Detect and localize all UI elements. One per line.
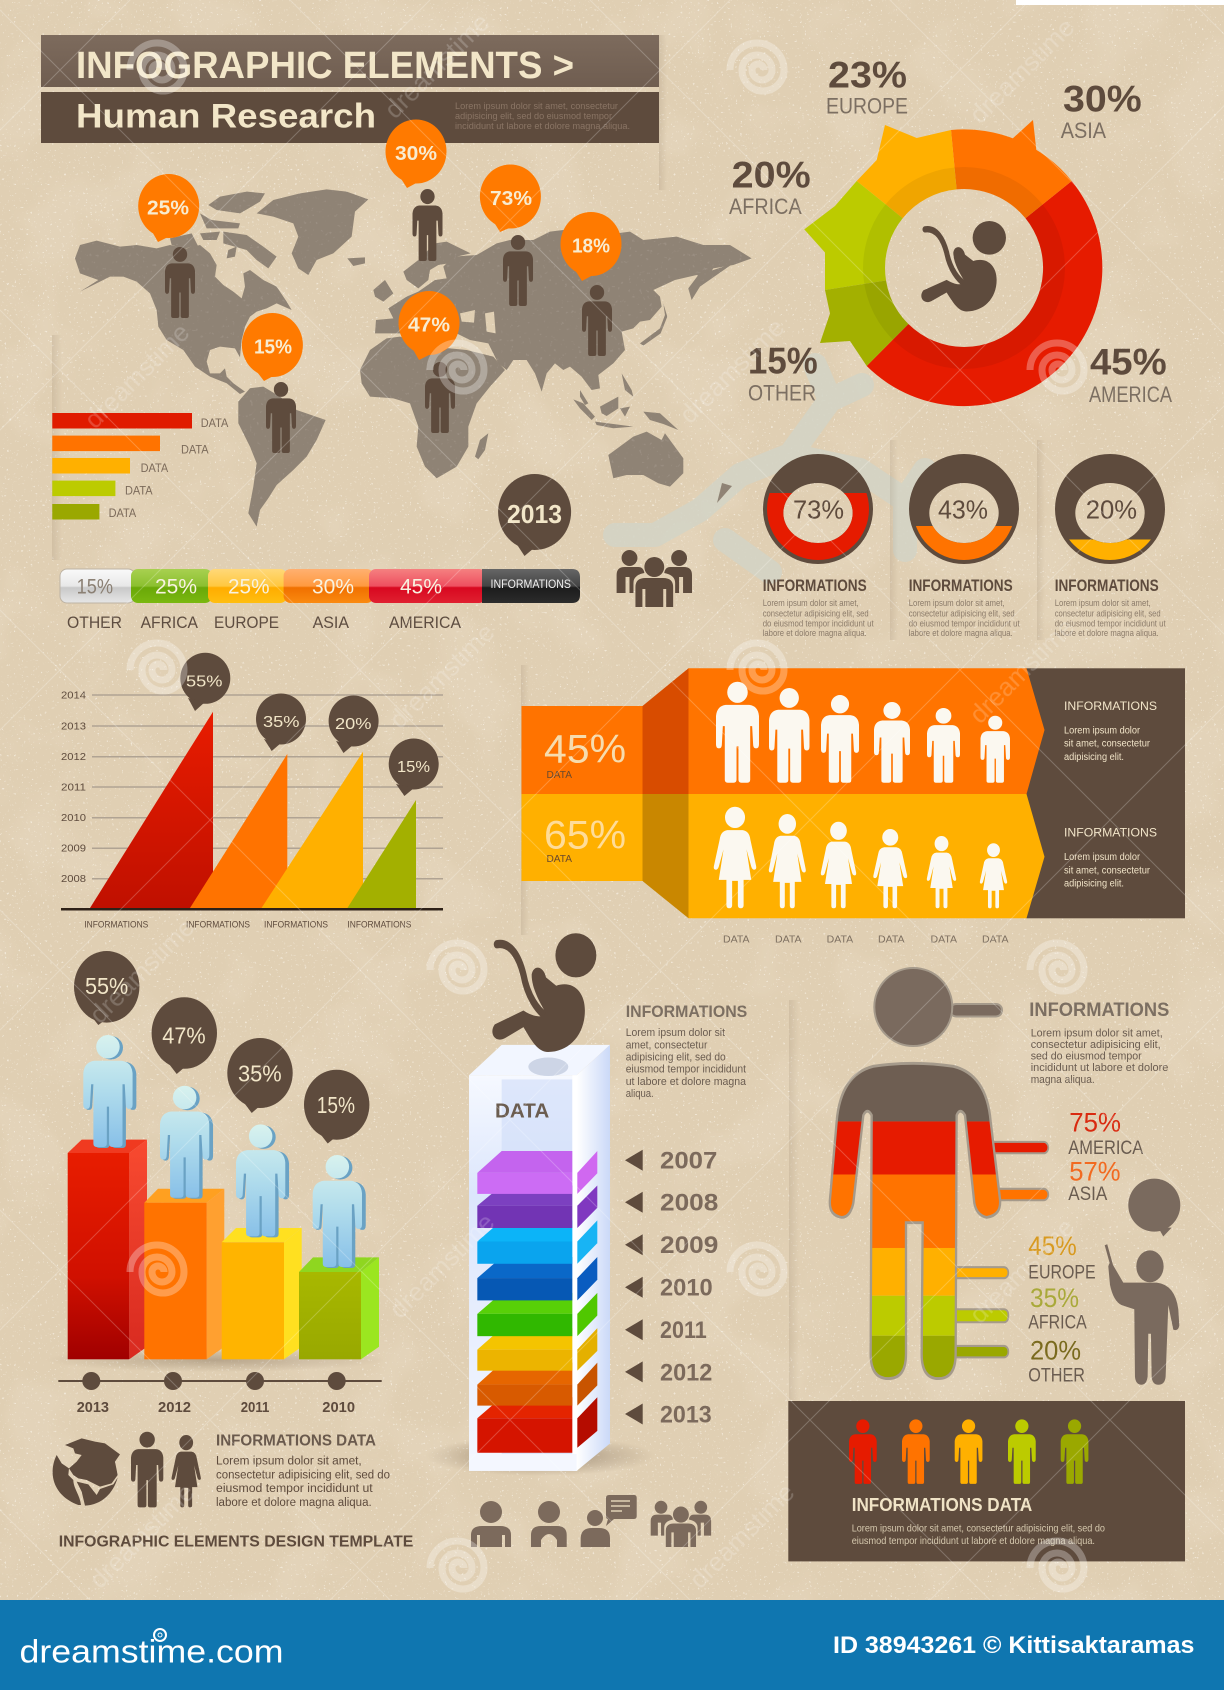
layer 2011 bbox=[477, 1328, 597, 1371]
body informations text bbox=[1029, 1000, 1169, 1086]
tower informations text bbox=[626, 1002, 747, 1100]
small donut 73%: Lorem ipsum dolor sit amet, bbox=[763, 598, 859, 609]
small donut 20%: consectetur adipisicing elit, sed bbox=[1055, 608, 1161, 620]
tower informations text: eiusmod tempor incididunt bbox=[626, 1064, 746, 1076]
bar bubble 15%: 15% bbox=[317, 1092, 355, 1118]
orange map bubbles bbox=[138, 120, 621, 381]
bar bubble 35%: 35% bbox=[238, 1060, 282, 1086]
yellow ribbon bbox=[688, 794, 1044, 918]
icon: group of people bbox=[617, 550, 692, 607]
legend panel bbox=[788, 1401, 1185, 1561]
body informations text: magna aliqua. bbox=[1031, 1074, 1095, 1086]
bar 2011 bbox=[222, 1228, 302, 1359]
bar bubble 55% bbox=[74, 951, 139, 1025]
body percentages bbox=[1028, 1108, 1121, 1365]
informations data block: labore et dolore magna aliqua. bbox=[216, 1497, 372, 1509]
layer 2013 bbox=[477, 1397, 597, 1453]
head with pointer bbox=[874, 968, 1002, 1046]
striped body bbox=[827, 1060, 1003, 1381]
bubble 15%: 15% bbox=[254, 336, 292, 358]
chart x labels bbox=[84, 919, 411, 930]
New Zealand bbox=[717, 483, 732, 503]
presenter body bbox=[1108, 1263, 1179, 1385]
small donut 20%: INFORMATIONS bbox=[1055, 577, 1159, 595]
year grid bbox=[92, 695, 443, 879]
tower informations text: aliqua. bbox=[626, 1088, 654, 1100]
bubble 25% bbox=[138, 174, 199, 242]
chart bubble 35%: 35% bbox=[263, 714, 300, 731]
2013 bubble bbox=[498, 474, 571, 556]
small donut 20%: labore et dolore magna aliqua. bbox=[1055, 628, 1159, 639]
chart bubble 15% bbox=[389, 738, 439, 796]
percentage bar labels: AMERICA bbox=[389, 613, 462, 632]
tower informations text: INFORMATIONS bbox=[626, 1002, 747, 1021]
watermark overlay: dreamstime bbox=[383, 617, 500, 734]
donut region names: AMERICA bbox=[1089, 382, 1172, 407]
glossy percentage bar bbox=[60, 569, 580, 603]
speech bubble bbox=[1128, 1179, 1180, 1237]
body diagram bbox=[827, 968, 1048, 1381]
chart bubble 20%: 20% bbox=[335, 716, 372, 733]
bar 2010 bbox=[299, 1257, 379, 1359]
2013 bubble: 2013 bbox=[507, 499, 562, 529]
glossy percentage bar: 30% bbox=[312, 575, 354, 598]
legend heading: INFORMATIONS DATA bbox=[852, 1495, 1032, 1515]
body percentages: 20% bbox=[1030, 1335, 1081, 1365]
watermark overlay: dreamstime bbox=[963, 1212, 1080, 1329]
bubble 15% bbox=[242, 313, 303, 381]
tab data labels: DATA bbox=[546, 853, 572, 865]
icon: person bust bbox=[471, 1501, 511, 1547]
orange fold bbox=[642, 668, 688, 794]
donut: Asia segment bbox=[951, 120, 1072, 218]
data labels: DATA bbox=[827, 933, 853, 945]
panel text: sit amet, consectetur bbox=[1064, 739, 1151, 750]
bubble 18% bbox=[560, 212, 622, 281]
layer 2009 bbox=[477, 1257, 597, 1300]
Africa bbox=[360, 337, 505, 478]
tab data labels: DATA bbox=[546, 769, 572, 781]
subtitle text: Human Research bbox=[76, 98, 376, 136]
blue figure 2011 bbox=[236, 1124, 289, 1237]
donut region names: AFRICA bbox=[729, 194, 802, 219]
small donut 73%: INFORMATIONS bbox=[763, 577, 867, 595]
donut: Other segment bbox=[820, 280, 908, 366]
3D bar chart bbox=[45, 951, 385, 1372]
banner lorem: incididunt ut labore et dolore magna aliqua. bbox=[455, 121, 630, 131]
watermark overlay: dreamstime bbox=[383, 1207, 500, 1324]
icon: globe bbox=[53, 1438, 120, 1506]
triangles bbox=[90, 712, 213, 908]
tower shadow bbox=[425, 1436, 655, 1476]
map people markers bbox=[165, 189, 612, 453]
percentage bar labels: AFRICA bbox=[141, 613, 199, 632]
yellow fold bbox=[642, 794, 688, 918]
bubble 73%: 73% bbox=[490, 188, 532, 210]
donut region names bbox=[729, 94, 1172, 407]
informations data block bbox=[216, 1433, 390, 1509]
year list with arrows: 2012 bbox=[660, 1359, 712, 1386]
connector bars bbox=[952, 1142, 1048, 1357]
data bars left bbox=[52, 413, 229, 520]
small donut 73% bbox=[763, 454, 874, 639]
icon: team bbox=[651, 1501, 711, 1547]
year list with arrows: 2008 bbox=[660, 1190, 718, 1217]
year axis labels: 2013 bbox=[61, 720, 86, 732]
bar bubble 47% bbox=[152, 997, 217, 1074]
presenter figure bbox=[1106, 1179, 1180, 1385]
body region names: EUROPE bbox=[1028, 1263, 1096, 1284]
glossy percentage bar: 45% bbox=[400, 575, 442, 598]
footer band bbox=[0, 1600, 1224, 1690]
bar shadow bbox=[45, 1348, 385, 1372]
watermark overlay: dreamstime bbox=[963, 612, 1080, 729]
icon: fetus bbox=[921, 221, 1006, 311]
donut: Africa segment bbox=[804, 181, 903, 290]
timeline bbox=[58, 1372, 382, 1416]
watermark overlay: dreamstime bbox=[683, 1477, 800, 1594]
panel text bbox=[1064, 699, 1157, 890]
bottom icon row bbox=[471, 1495, 711, 1547]
small donut 73%: 73% bbox=[793, 494, 844, 524]
data labels: DATA bbox=[775, 933, 802, 945]
informations data block: eiusmod tempor incididunt ut bbox=[216, 1483, 374, 1495]
donut: America segment bbox=[867, 181, 1102, 406]
tower informations text: adipisicing elit, sed do bbox=[626, 1052, 726, 1064]
percentage bar labels: OTHER bbox=[67, 613, 122, 632]
panel text: adipisicing elit. bbox=[1064, 752, 1124, 763]
percentage bar labels bbox=[67, 613, 462, 632]
body percentages: 57% bbox=[1069, 1157, 1121, 1187]
year axis labels bbox=[61, 690, 86, 885]
layer 2007 bbox=[477, 1151, 597, 1194]
year axis labels: 2011 bbox=[61, 782, 86, 794]
small donut 43%: labore et dolore magna aliqua. bbox=[909, 628, 1013, 639]
glossy percentage bar: 25% bbox=[228, 575, 270, 598]
glossy percentage bar: INFORMATIONS bbox=[490, 577, 571, 591]
bar bubble 15% bbox=[304, 1070, 369, 1144]
donut labels: 45% bbox=[1090, 342, 1167, 383]
legend figures bbox=[849, 1419, 1088, 1484]
pointer bbox=[1106, 1245, 1112, 1265]
icon: man and woman bbox=[131, 1432, 201, 1507]
brown info panel bbox=[1026, 668, 1185, 918]
chart x labels: INFORMATIONS bbox=[264, 919, 328, 930]
legend body text: Lorem ipsum dolor sit amet, consectetur adipisicing elit, sed do bbox=[852, 1523, 1105, 1535]
icon: person speaking bbox=[581, 1495, 637, 1547]
layer 2012 bbox=[477, 1363, 597, 1406]
layer 2008 bbox=[477, 1220, 597, 1264]
timeline: 2013 bbox=[77, 1399, 109, 1416]
65% label: 65% bbox=[544, 813, 626, 857]
timeline: 2012 bbox=[158, 1399, 191, 1416]
chart x labels: INFORMATIONS bbox=[186, 919, 250, 930]
chart x labels: INFORMATIONS bbox=[347, 919, 411, 930]
timeline: 2010 bbox=[322, 1399, 355, 1416]
North America bbox=[75, 241, 292, 394]
year list with arrows: 2007 bbox=[660, 1148, 717, 1175]
watermark overlay: dreamstime bbox=[78, 317, 195, 434]
informations data block: INFORMATIONS DATA bbox=[216, 1433, 376, 1450]
small donut 73%: consectetur adipisicing elit, sed bbox=[763, 608, 869, 620]
legend body text bbox=[852, 1523, 1105, 1547]
data labels: DATA bbox=[930, 933, 957, 945]
body percentages: 75% bbox=[1069, 1108, 1121, 1138]
banner lorem bbox=[455, 101, 630, 131]
body informations text: sed do eiusmod tempor bbox=[1031, 1050, 1142, 1062]
Kamchatka bbox=[688, 263, 733, 300]
data bars left: DATA bbox=[201, 418, 229, 430]
year axis labels: 2009 bbox=[61, 842, 86, 854]
year axis labels: 2010 bbox=[61, 812, 86, 824]
tower label: DATA bbox=[495, 1100, 549, 1122]
body region names bbox=[1028, 1138, 1144, 1386]
world map bbox=[75, 189, 752, 527]
data bars left: DATA bbox=[181, 445, 209, 457]
Madagascar bbox=[475, 433, 488, 459]
Scandinavia bbox=[403, 242, 471, 288]
year list with arrows: 2013 bbox=[660, 1401, 712, 1428]
presenter head bbox=[1136, 1250, 1164, 1282]
tower informations text: ut labore et dolore magna bbox=[626, 1076, 747, 1088]
year list with arrows: 2011 bbox=[660, 1317, 707, 1344]
title banner bbox=[41, 35, 659, 143]
small donut 43%: 43% bbox=[938, 494, 988, 524]
chart bubble 35% bbox=[256, 694, 306, 751]
bubble 18%: 18% bbox=[572, 236, 610, 258]
percentage bar labels: ASIA bbox=[313, 613, 350, 632]
small donut 20%: 20% bbox=[1086, 494, 1137, 524]
small donut 73%: labore et dolore magna aliqua. bbox=[763, 628, 867, 639]
watermark overlay: dreamstime bbox=[378, 7, 495, 124]
watermark overlay: dreamstime bbox=[83, 1477, 200, 1594]
panel text: adipisicing elit. bbox=[1064, 879, 1124, 890]
donut region names: OTHER bbox=[748, 381, 816, 406]
Greenland bbox=[257, 189, 368, 275]
small donut 20% bbox=[1055, 454, 1166, 639]
donut: Europe segment bbox=[857, 125, 957, 218]
small donut 20%: do eiusmod tempor incididunt ut bbox=[1055, 618, 1166, 630]
data bars left: DATA bbox=[125, 486, 153, 498]
body informations text: consectetur adipisicing elit, bbox=[1031, 1039, 1161, 1051]
title text: INFOGRAPHIC ELEMENTS > bbox=[76, 45, 574, 87]
blue figure 2013 bbox=[83, 1035, 136, 1148]
female figures bbox=[714, 807, 1007, 908]
bubble 73% bbox=[480, 164, 541, 232]
dreamstime logo: dreamstime.com bbox=[20, 1634, 284, 1670]
small donut 43% bbox=[909, 454, 1020, 639]
panel text: Lorem ipsum dolor bbox=[1064, 852, 1141, 863]
tower informations text: amet, consectetur bbox=[626, 1039, 708, 1051]
body region names: ASIA bbox=[1068, 1184, 1108, 1205]
Australia bbox=[608, 432, 683, 487]
bar bubble 55%: 55% bbox=[85, 973, 128, 999]
tab data labels bbox=[546, 769, 572, 865]
year axis labels: 2014 bbox=[61, 690, 86, 702]
body informations text: Lorem ipsum dolor sit amet, bbox=[1031, 1028, 1163, 1040]
triangle area chart bbox=[61, 653, 443, 930]
data bars left: DATA bbox=[109, 508, 137, 520]
45% label: 45% bbox=[544, 728, 626, 772]
data bars left: DATA bbox=[141, 463, 169, 475]
Eurasia bbox=[375, 230, 752, 392]
axis line bbox=[61, 908, 443, 910]
layer 2007b bbox=[477, 1185, 597, 1228]
watermark overlay: dreamstime bbox=[83, 912, 200, 1029]
informations data block: Lorem ipsum dolor sit amet, bbox=[216, 1456, 362, 1468]
Japan bbox=[640, 303, 667, 346]
panel text: INFORMATIONS bbox=[1064, 699, 1157, 713]
year list with arrows bbox=[625, 1148, 718, 1428]
Old World bbox=[360, 230, 752, 487]
banner lorem: adipisicing elit, sed do eiusmod tempor bbox=[455, 111, 612, 121]
icon: person with collar bbox=[531, 1501, 567, 1547]
body region names: AMERICA bbox=[1068, 1138, 1144, 1159]
chart bubble 55% bbox=[180, 653, 230, 711]
chart x labels: INFORMATIONS bbox=[84, 919, 148, 930]
donut labels: 30% bbox=[1063, 78, 1142, 120]
layer 2010 bbox=[477, 1293, 597, 1336]
donut region names: EUROPE bbox=[826, 94, 908, 119]
blue figure 2010 bbox=[313, 1155, 366, 1268]
small donut 43%: consectetur adipisicing elit, sed bbox=[909, 608, 1015, 620]
body informations text: INFORMATIONS bbox=[1029, 1000, 1169, 1021]
bubble 30% bbox=[386, 120, 446, 188]
glossy percentage bar: 25% bbox=[155, 575, 197, 598]
year list with arrows: 2010 bbox=[660, 1275, 713, 1302]
body informations text: incididunt ut labore et dolore bbox=[1031, 1062, 1168, 1074]
blue figure 2012 bbox=[160, 1086, 213, 1199]
footer heading: INFOGRAPHIC ELEMENTS DESIGN TEMPLATE bbox=[59, 1534, 414, 1551]
Arctic islands bbox=[170, 192, 277, 268]
UK bbox=[373, 280, 393, 302]
bubble 47% bbox=[398, 291, 460, 360]
donut labels bbox=[732, 54, 1167, 383]
glass tower chart bbox=[425, 933, 655, 1476]
small donut 43%: INFORMATIONS bbox=[909, 577, 1013, 595]
informations data block: consectetur adipisicing elit, sed do bbox=[216, 1469, 390, 1481]
timeline: 2011 bbox=[241, 1399, 269, 1416]
donut labels: 20% bbox=[732, 154, 811, 195]
donut region names: ASIA bbox=[1061, 118, 1106, 143]
icon: fetus on tower bbox=[492, 933, 596, 1052]
body region names: AFRICA bbox=[1028, 1312, 1087, 1333]
panel text: sit amet, consectetur bbox=[1064, 865, 1151, 876]
small donut 43%: do eiusmod tempor incididunt ut bbox=[909, 618, 1020, 630]
chart bubble 20% bbox=[329, 696, 379, 753]
small donut 20%: Lorem ipsum dolor sit amet, bbox=[1055, 598, 1151, 609]
bubble 25%: 25% bbox=[147, 198, 189, 220]
left orange tab bbox=[522, 706, 642, 794]
data labels: DATA bbox=[723, 933, 750, 945]
watermark overlay: dreamstime bbox=[963, 12, 1080, 129]
bubble 30%: 30% bbox=[395, 143, 437, 165]
Iceland bbox=[347, 257, 365, 266]
body percentages: 45% bbox=[1028, 1231, 1077, 1261]
year list with arrows: 2009 bbox=[660, 1232, 718, 1259]
watermark overlay: dreamstime bbox=[673, 312, 790, 429]
year axis labels: 2012 bbox=[61, 751, 86, 763]
South America bbox=[238, 387, 326, 527]
bar 2013 bbox=[68, 1140, 147, 1359]
title band bbox=[41, 35, 659, 87]
data labels bbox=[723, 933, 1008, 945]
tower informations text: Lorem ipsum dolor sit bbox=[626, 1027, 725, 1039]
image id and author: ID 38943261 © Kittisaktaramas bbox=[833, 1632, 1194, 1659]
small donut 43%: Lorem ipsum dolor sit amet, bbox=[909, 598, 1005, 609]
percentage bar labels: EUROPE bbox=[214, 613, 279, 632]
bar 2012 bbox=[144, 1189, 224, 1359]
Americas bbox=[75, 189, 368, 527]
donut labels: 23% bbox=[828, 54, 907, 96]
Southeast Asia islands bbox=[573, 373, 678, 430]
chart bubble 15%: 15% bbox=[397, 759, 430, 776]
data labels: DATA bbox=[878, 933, 904, 945]
chart bubble 55%: 55% bbox=[186, 674, 222, 691]
subtitle band bbox=[41, 92, 659, 143]
panel text: Lorem ipsum dolor bbox=[1064, 725, 1141, 736]
year axis labels: 2008 bbox=[61, 873, 86, 885]
body percentages: 35% bbox=[1030, 1283, 1079, 1313]
tower body bbox=[469, 1045, 610, 1471]
stacked layers bbox=[477, 1151, 597, 1453]
body region names: OTHER bbox=[1028, 1365, 1085, 1386]
bar bubble 35% bbox=[227, 1038, 293, 1113]
male figures bbox=[716, 682, 1010, 783]
bubble 47%: 47% bbox=[408, 314, 450, 336]
bar bubble 47%: 47% bbox=[162, 1023, 206, 1049]
data labels: DATA bbox=[982, 933, 1008, 945]
small donut 73%: do eiusmod tempor incididunt ut bbox=[763, 618, 874, 630]
legend body text: eiusmod tempor incididunt ut labore et dolore magna aliqua. bbox=[852, 1535, 1095, 1547]
left yellow tab bbox=[522, 794, 642, 881]
donut labels: 15% bbox=[748, 341, 818, 382]
main donut chart bbox=[804, 120, 1102, 406]
gender ribbon panel bbox=[522, 668, 1185, 945]
banner lorem: Lorem ipsum dolor sit amet, consectetur bbox=[455, 101, 618, 111]
orange ribbon bbox=[688, 668, 1044, 794]
panel text: INFORMATIONS bbox=[1064, 826, 1157, 840]
glossy percentage bar: 15% bbox=[77, 575, 113, 598]
